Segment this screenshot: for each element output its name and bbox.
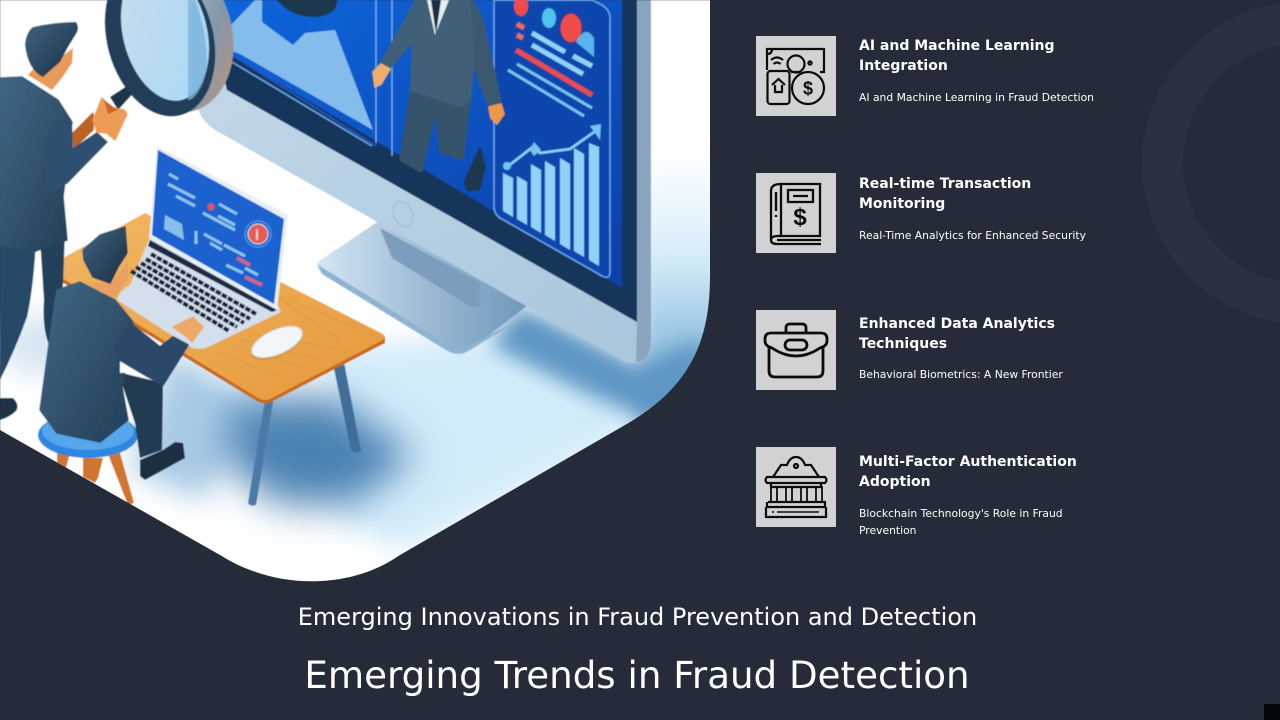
item 4 icon: bank building <box>756 447 836 527</box>
item 1 icon: money and mobile banking <box>756 36 836 116</box>
item 1 heading: AI and Machine Learning <box>859 38 1055 54</box>
item 1 description: AI and Machine Learning in Fraud Detection <box>859 91 1094 104</box>
monitor stand <box>317 220 528 354</box>
left chart panel <box>229 0 392 156</box>
magnifying glass <box>104 0 234 118</box>
item 4 heading: Adoption <box>859 474 931 490</box>
monitor body <box>197 0 651 363</box>
item 2 heading: Monitoring <box>859 196 945 212</box>
man seated at desk <box>40 227 203 480</box>
item 2 heading: Real-time Transaction <box>859 176 1031 192</box>
subtitle: Emerging Innovations in Fraud Prevention and Detection <box>298 603 977 631</box>
item 4 description: Prevention <box>859 524 916 537</box>
item 1 icon: money and mobile banking: $ <box>803 78 813 98</box>
item 4 description: Blockchain Technology's Role in Fraud <box>859 507 1063 520</box>
item 4 heading: Multi-Factor Authentication <box>859 454 1077 470</box>
item 2 heading <box>859 176 1031 212</box>
item 3 icon: briefcase <box>756 310 836 390</box>
title: Emerging Trends in Fraud Detection <box>304 653 970 697</box>
item 2 icon: finance book: $ <box>793 204 807 231</box>
item 2 description: Real-Time Analytics for Enhanced Security <box>859 229 1086 242</box>
figure on screen <box>373 0 504 190</box>
corner marker <box>1264 704 1280 720</box>
item 1 heading: Integration <box>859 58 948 74</box>
item 2 icon: finance book <box>756 173 836 253</box>
floor <box>0 0 730 590</box>
right dashboard panel <box>494 0 610 277</box>
laptop <box>117 146 288 349</box>
item 1 heading <box>859 38 1055 74</box>
stool <box>38 412 138 505</box>
man standing with magnifier <box>0 22 138 420</box>
desk <box>50 213 385 506</box>
item 3 heading: Techniques <box>859 336 947 352</box>
item 4 description <box>859 507 1063 537</box>
item 4 heading <box>859 454 1077 490</box>
decorative ring <box>1100 0 1280 340</box>
illustration: fraud analysts at monitor and laptop <box>0 0 710 582</box>
item 3 heading: Enhanced Data Analytics <box>859 316 1055 332</box>
item 3 description: Behavioral Biometrics: A New Frontier <box>859 368 1063 381</box>
mouse <box>250 325 304 360</box>
monitor screen <box>213 0 622 288</box>
item 3 heading <box>859 316 1055 352</box>
